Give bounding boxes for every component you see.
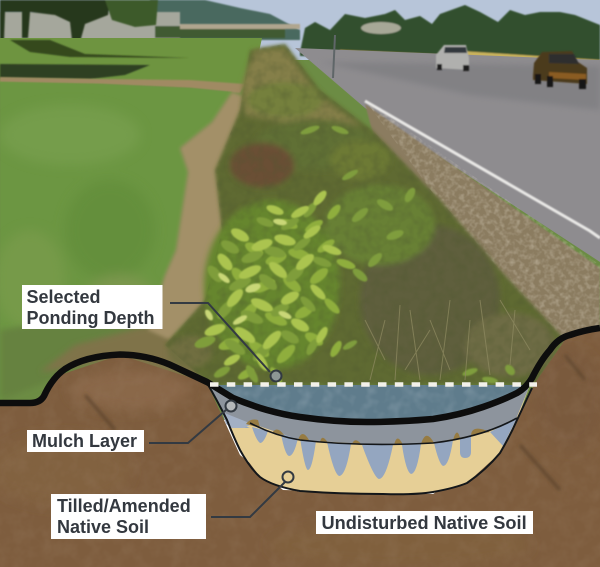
far lawn [0, 38, 262, 84]
soil shading [2, 354, 586, 562]
foliage texture [179, 45, 552, 385]
soil cross-section [0, 328, 600, 567]
distant hills [150, 0, 300, 40]
label: Tilled/Amended Native Soil [51, 472, 294, 539]
bright leaves [217, 203, 357, 387]
mid-green leaves [300, 124, 517, 384]
label: Mulch Layer: Mulch Layer [32, 431, 137, 451]
mulch band [208, 385, 530, 445]
label: Selected Ponding Depth: Ponding Depth [26, 308, 154, 328]
plant mass [160, 40, 570, 387]
ground surface line [0, 328, 600, 422]
label: Tilled/Amended Native Soil: Native Soil [57, 517, 149, 537]
fence and background buildings [0, 12, 300, 42]
ponding water [210, 385, 532, 423]
brown suv [533, 51, 587, 89]
main lawn [0, 82, 232, 400]
tilled amended soil layer [207, 383, 534, 494]
left mulch wedge [222, 412, 252, 428]
road shading [320, 62, 600, 110]
selected ponding depth dashed line [210, 382, 537, 387]
photo base tone [0, 0, 600, 420]
lawn highlights [0, 105, 155, 330]
mulch strip across lawn [0, 77, 245, 93]
brown edge near soil [40, 325, 205, 385]
water texture [228, 385, 505, 418]
tree shadows on lawn [0, 40, 190, 79]
road edge line [365, 101, 600, 238]
photo: roadside planted swale [0, 0, 600, 420]
dry grass strokes [365, 300, 530, 380]
water infiltration fingers [230, 418, 517, 479]
roadside post [333, 35, 335, 78]
sky [0, 0, 600, 60]
label: Selected Ponding Depth [22, 285, 282, 382]
background trees [0, 0, 158, 42]
distant tree line [300, 5, 600, 65]
mulch roots [246, 420, 490, 445]
roadway [295, 48, 600, 262]
label: Tilled/Amended Native Soil: Tilled/Amended [57, 496, 191, 516]
silver car [436, 45, 469, 71]
gravel shoulder [365, 104, 600, 385]
undisturbed native soil [0, 328, 600, 567]
gravel texture [370, 106, 600, 346]
pale leaves [203, 218, 293, 327]
lawn patch near soil [0, 320, 170, 400]
upper shrubs [168, 48, 555, 377]
basin outline [207, 383, 532, 494]
mulch path beside plants [148, 92, 262, 340]
thin mulch/soil boundary [250, 418, 517, 444]
label: Undisturbed Native Soil: Undisturbed Native Soil [322, 513, 527, 533]
label: Selected Ponding Depth: Selected [26, 287, 101, 307]
label: Mulch Layer [27, 400, 236, 452]
